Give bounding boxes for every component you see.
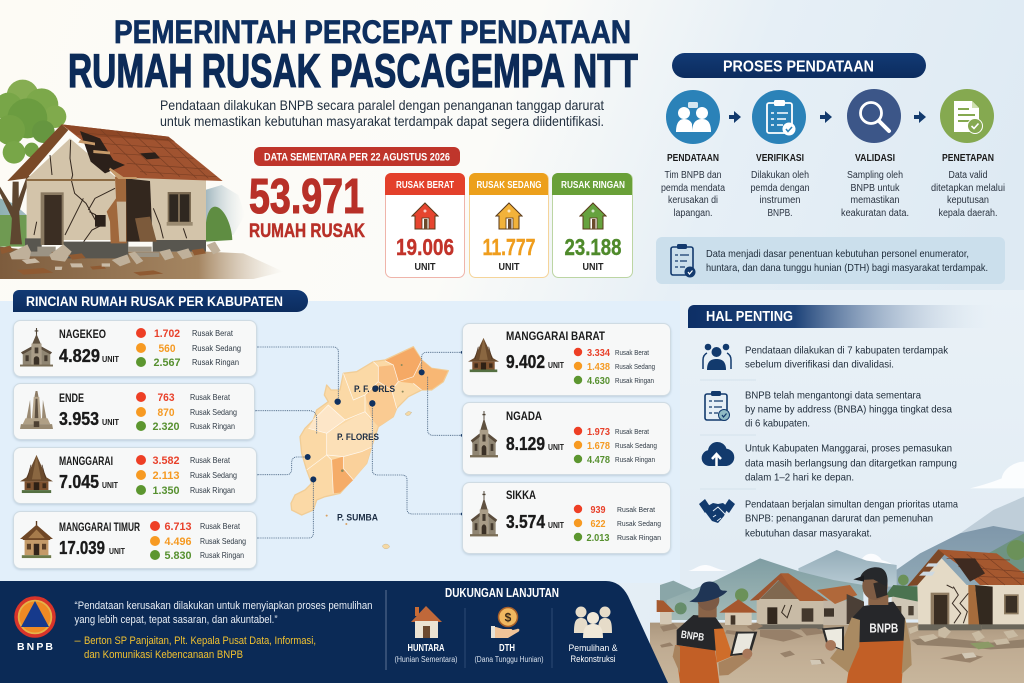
card: rusak ringan: UNIT: [582, 261, 604, 273]
map: NTT with connectors: [253, 346, 463, 549]
card: sikka: SIKKA: [506, 490, 536, 502]
clouds: [688, 462, 1024, 571]
card: manggarai barat: UNIT: [548, 360, 565, 370]
item: upload manggarai: dalam 1–2 hari ke depan.: [745, 472, 854, 484]
card: nagekeo: Rusak Ringan: [192, 357, 239, 367]
item: bnba: [705, 390, 952, 430]
item: bnba: BNPB telah mengantongi data sementara: [745, 390, 921, 402]
green-roof house: [892, 597, 918, 619]
item: handshake: BNPB: penanganan darurat dan pemenuhan: [745, 512, 933, 524]
ground: [650, 623, 1024, 683]
footer band: [0, 581, 668, 683]
subtitle: [160, 97, 604, 129]
icon: green house: [580, 203, 606, 229]
panel: hal penting: [688, 305, 994, 540]
support: huntara: HUNTARA: [408, 643, 444, 654]
ground: [0, 247, 283, 279]
collapsed section: [126, 178, 153, 242]
panel: proses pendataan: [656, 53, 1005, 284]
item: handshake: Pendataan berjalan simultan dengan prioritas utama: [745, 498, 958, 510]
officer: left: [673, 581, 757, 683]
map land: [291, 347, 448, 549]
arrow: [729, 111, 741, 123]
card: rusak ringan: 23.188: [564, 234, 622, 260]
step: validasi: BNPB untuk: [850, 183, 900, 194]
total figure: RUMAH RUSAK: [249, 220, 365, 242]
step: pendataan: PENDATAAN: [667, 152, 719, 164]
card: ende: 870: [158, 407, 174, 419]
step: validasi: memastikan: [850, 195, 900, 206]
far house: [660, 612, 672, 624]
card: sikka: 622: [590, 519, 606, 530]
step: validasi: Sampling oleh: [847, 170, 903, 181]
heading: rincian rumah rusak: [13, 290, 308, 312]
officer: right: [822, 567, 912, 683]
support: dth: DTH: [499, 643, 515, 654]
icon: wooden house: [20, 521, 53, 558]
card: nagekeo: Rusak Sedang: [192, 343, 241, 353]
mid house: [757, 598, 824, 625]
foundation: [25, 238, 206, 258]
panel: rincian per kabupaten background: [0, 301, 680, 583]
icon: traditional house: [468, 338, 499, 372]
heading: proses pendataan: [672, 53, 926, 78]
heading: dukungan lanjutan: DUKUNGAN LANJUTAN: [445, 586, 559, 600]
card: manggarai barat: 9.402: [506, 351, 545, 372]
card: ngada: Rusak Berat: [615, 427, 649, 436]
step: penetapan: Data valid: [948, 170, 988, 181]
map labels: P. FLORES: [337, 432, 379, 443]
support: pemulihan: Rekonstruksi: [570, 654, 616, 665]
step: penetapan: kepala daerah.: [938, 208, 998, 219]
card: ngada: Rusak Sedang: [615, 441, 657, 450]
step: verifikasi: pemda dengan: [750, 183, 810, 194]
arrow: [914, 111, 926, 123]
card: manggarai: 3.582: [152, 455, 180, 467]
card: ngada: [462, 402, 670, 474]
card: ende: 763: [158, 392, 174, 404]
step: verifikasi: VERIFIKASI: [756, 152, 804, 164]
quote: Berton SP Panjaitan, Plt. Kepala Pusat Data, Informasi,: [84, 635, 316, 647]
subtitle: untuk memastikan kebutuhan masyarakat terdampak dapat segera diidentifikasi.: [160, 113, 604, 129]
step: validasi: keakuratan data.: [841, 208, 909, 219]
card: nagekeo: 4.829: [59, 345, 100, 366]
heading: hal penting: [688, 305, 994, 328]
card: manggarai: 1.350: [152, 485, 180, 497]
date badge: [254, 147, 460, 166]
title: RUMAH RUSAK PASCAGEMPA NTT: [68, 44, 638, 97]
card: manggarai barat: MANGGARAI BARAT: [506, 331, 605, 343]
big house: [917, 558, 1024, 625]
card: ende: 2.320: [152, 421, 180, 433]
support: huntara: [394, 606, 458, 664]
step: penetapan: ditetapkan melalui: [931, 183, 1005, 194]
card: manggarai timur: 17.039: [59, 537, 105, 558]
cracks: [34, 140, 187, 242]
card: nagekeo: 1.702: [154, 328, 180, 340]
date badge: DATA SEMENTARA PER 22 AGUSTUS 2026: [264, 152, 450, 164]
item: handshake: [699, 498, 958, 540]
logo: bnpb: BNPB: [17, 641, 53, 653]
illustration: damaged house: [0, 80, 283, 279]
card: nagekeo: [14, 320, 256, 376]
card: ngada: 8.129: [506, 433, 545, 454]
quote: dan Komunikasi Kebencanaan BNPB: [84, 649, 243, 661]
card: nagekeo: 2.567: [154, 357, 180, 369]
card: nagekeo: UNIT: [102, 354, 120, 364]
card: ngada: 4.478: [587, 455, 610, 466]
logo: bnpb: [16, 598, 54, 653]
total figure: [249, 170, 365, 242]
card: sikka: Rusak Ringan: [617, 533, 661, 542]
card: rusak berat: UNIT: [414, 261, 436, 273]
tree: [0, 80, 66, 244]
heading: hal penting: HAL PENTING: [706, 308, 793, 325]
card: ende: Rusak Berat: [190, 392, 231, 402]
card: sikka: UNIT: [548, 520, 565, 530]
support: pemulihan: [568, 606, 618, 665]
illustration: disaster scene with officers: [650, 462, 1024, 683]
map labels: P. SUMBA: [337, 512, 378, 524]
card: ende: ENDE: [59, 393, 84, 405]
card: ende: UNIT: [102, 417, 120, 427]
card: rusak ringan: RUSAK RINGAN: [561, 179, 625, 191]
item: upload manggarai: data masih berlangsung dan ditargetkan rampung: [745, 458, 957, 470]
card: ende: [14, 384, 254, 440]
step: pendataan: Tim BNPB dan: [664, 170, 722, 181]
card: manggarai: Rusak Sedang: [190, 470, 237, 480]
distant hills: [0, 198, 27, 245]
card: manggarai: 7.045: [59, 471, 99, 492]
step: pendataan: kerusakan di: [668, 195, 718, 206]
house three: [823, 601, 860, 625]
icon: red house: [412, 203, 438, 229]
heading: rincian rumah rusak: RINCIAN RUMAH RUSAK PER KABUPATEN: [26, 294, 283, 309]
card: manggarai: [14, 448, 256, 504]
walls: [27, 138, 206, 240]
card: ende: 3.953: [59, 408, 99, 429]
card: sikka: 3.574: [506, 511, 546, 532]
card: manggarai: UNIT: [102, 480, 119, 490]
card: manggarai timur: MANGGARAI TIMUR: [59, 522, 141, 534]
card: manggarai timur: 6.713: [164, 521, 192, 533]
card: rusak ringan: [552, 173, 632, 278]
item: upload manggarai: [702, 442, 957, 484]
step: verifikasi: [750, 90, 810, 219]
quote: [74, 600, 372, 661]
title: PEMERINTAH PERCEPAT PENDATAAN: [114, 14, 631, 50]
callout: dasar penentuan: Data menjadi dasar penentuan kebutuhan personel enumerator,: [706, 248, 969, 260]
icon: traditional house: [20, 455, 53, 493]
card: ngada: Rusak Ringan: [615, 455, 655, 464]
step: verifikasi: instrumen: [760, 195, 800, 206]
officer: right: BNPB: [869, 622, 898, 636]
card: sikka: 2.013: [586, 533, 610, 544]
card: rusak sedang: UNIT: [498, 261, 520, 273]
title: [68, 14, 638, 97]
card: ngada: 1.973: [587, 427, 610, 438]
arrow: [820, 111, 832, 123]
card: rusak sedang: RUSAK SEDANG: [476, 179, 542, 191]
map labels: P. F. ORLS: [354, 384, 395, 395]
card: manggarai barat: Rusak Ringan: [615, 376, 654, 385]
subtitle: Pendataan dilakukan BNPB secara paralel dengan penanganan tanggap darurat: [160, 97, 604, 113]
item: tujuh kabupaten: [703, 344, 949, 370]
small house: [725, 612, 752, 625]
connectors: [254, 347, 462, 538]
card: ngada: 1.678: [587, 441, 610, 452]
callout: dasar penentuan: [656, 237, 1005, 284]
support: dth: (Dana Tunggu Hunian): [474, 655, 544, 664]
step: verifikasi: BNPB.: [768, 208, 792, 219]
total figure: 53.971: [249, 170, 364, 224]
window: [168, 192, 191, 223]
card: nagekeo: 560: [158, 343, 176, 355]
card: manggarai timur: 5.830: [164, 550, 192, 562]
support: dth: $: [505, 610, 512, 624]
card: sikka: Rusak Sedang: [617, 519, 661, 528]
support: pemulihan: Pemulihan &: [568, 643, 618, 654]
card: manggarai barat: Rusak Berat: [615, 348, 649, 357]
step: verifikasi: Dilakukan oleh: [751, 170, 809, 181]
card: manggarai: Rusak Berat: [190, 455, 231, 465]
icon: church: [20, 328, 53, 367]
card: manggarai timur: Rusak Berat: [200, 521, 241, 531]
card: rusak berat: [385, 173, 465, 278]
card: nagekeo: Rusak Berat: [192, 328, 234, 338]
card: manggarai: Rusak Ringan: [190, 485, 235, 495]
icon: church: [470, 411, 498, 457]
step: validasi: VALIDASI: [855, 152, 895, 164]
quote: “Pendataan kerusakan dilakukan untuk menyiapkan proses pemulihan: [74, 600, 372, 612]
card: manggarai barat: 3.334: [587, 348, 610, 359]
card: rusak berat: 19.006: [396, 234, 454, 260]
door: [41, 192, 64, 245]
step: pendataan: [661, 90, 726, 219]
step: pendataan: lapangan.: [674, 208, 712, 219]
item: tujuh kabupaten: Pendataan dilakukan di 7 kabupaten terdampak: [745, 344, 949, 356]
step: penetapan: keputusan: [947, 195, 989, 206]
card: manggarai timur: [14, 512, 256, 568]
rubble: [912, 637, 1024, 649]
icon: orange house: [496, 203, 522, 229]
map pins: [253, 346, 463, 539]
card: sikka: 939: [590, 505, 606, 516]
card: manggarai: MANGGARAI: [59, 456, 113, 468]
card: ende: Rusak Sedang: [190, 407, 237, 417]
card: manggarai barat: 1.438: [587, 362, 610, 373]
map labels: [337, 384, 395, 524]
step: validasi: [841, 89, 909, 219]
item: upload manggarai: Untuk Kabupaten Manggarai, proses pemasukan: [745, 442, 952, 454]
card: manggarai timur: UNIT: [109, 546, 126, 556]
card: manggarai: 2.113: [152, 470, 180, 482]
card: manggarai timur: 4.496: [164, 536, 192, 548]
card: manggarai timur: Rusak Ringan: [200, 550, 244, 560]
card: manggarai barat: 4.630: [587, 376, 610, 387]
support: huntara: (Hunian Sementara): [394, 655, 458, 664]
callout: dasar penentuan: huntara, dan dana tunggu hunian (DTH) bagi masyarakat terdampak.: [706, 262, 988, 274]
officer: left: BNPB: [680, 629, 705, 644]
rubble: [9, 242, 221, 266]
card: rusak sedang: 11.777: [482, 234, 536, 260]
card: rusak berat: RUSAK BERAT: [396, 179, 454, 191]
item: handshake: kebutuhan dasar masyarakat.: [745, 528, 872, 540]
item: bnba: by name by address (BNBA) hingga tingkat desa: [745, 404, 952, 416]
mountains: [960, 497, 1024, 550]
card: manggarai barat: Rusak Sedang: [615, 362, 655, 371]
quote: –: [74, 635, 82, 647]
quote: yang lebih cepat, tepat sasaran, dan akuntabel.”: [74, 614, 278, 626]
card: sikka: Rusak Berat: [617, 505, 655, 514]
card: nagekeo: NAGEKEO: [59, 329, 106, 341]
roof: [7, 124, 68, 181]
step: penetapan: PENETAPAN: [942, 152, 994, 164]
step: penetapan: [931, 89, 1005, 219]
card: ngada: NGADA: [506, 411, 542, 423]
card: ngada: UNIT: [548, 442, 565, 452]
support: dth: [474, 608, 544, 664]
card: ende: Rusak Ringan: [190, 421, 235, 431]
card: manggarai timur: Rusak Sedang: [200, 536, 246, 546]
card: manggarai barat: [462, 324, 670, 396]
heading: proses pendataan: PROSES PENDATAAN: [723, 58, 874, 76]
icon: monument: [20, 391, 53, 429]
card: rusak sedang: [469, 173, 548, 278]
card: sikka: [462, 482, 670, 554]
item: tujuh kabupaten: sebelum diverifikasi dan divalidasi.: [745, 358, 894, 370]
icon: church: [470, 491, 498, 536]
step: pendataan: pemda mendata: [661, 183, 726, 194]
item: bnba: di 6 kabupaten.: [745, 418, 810, 430]
